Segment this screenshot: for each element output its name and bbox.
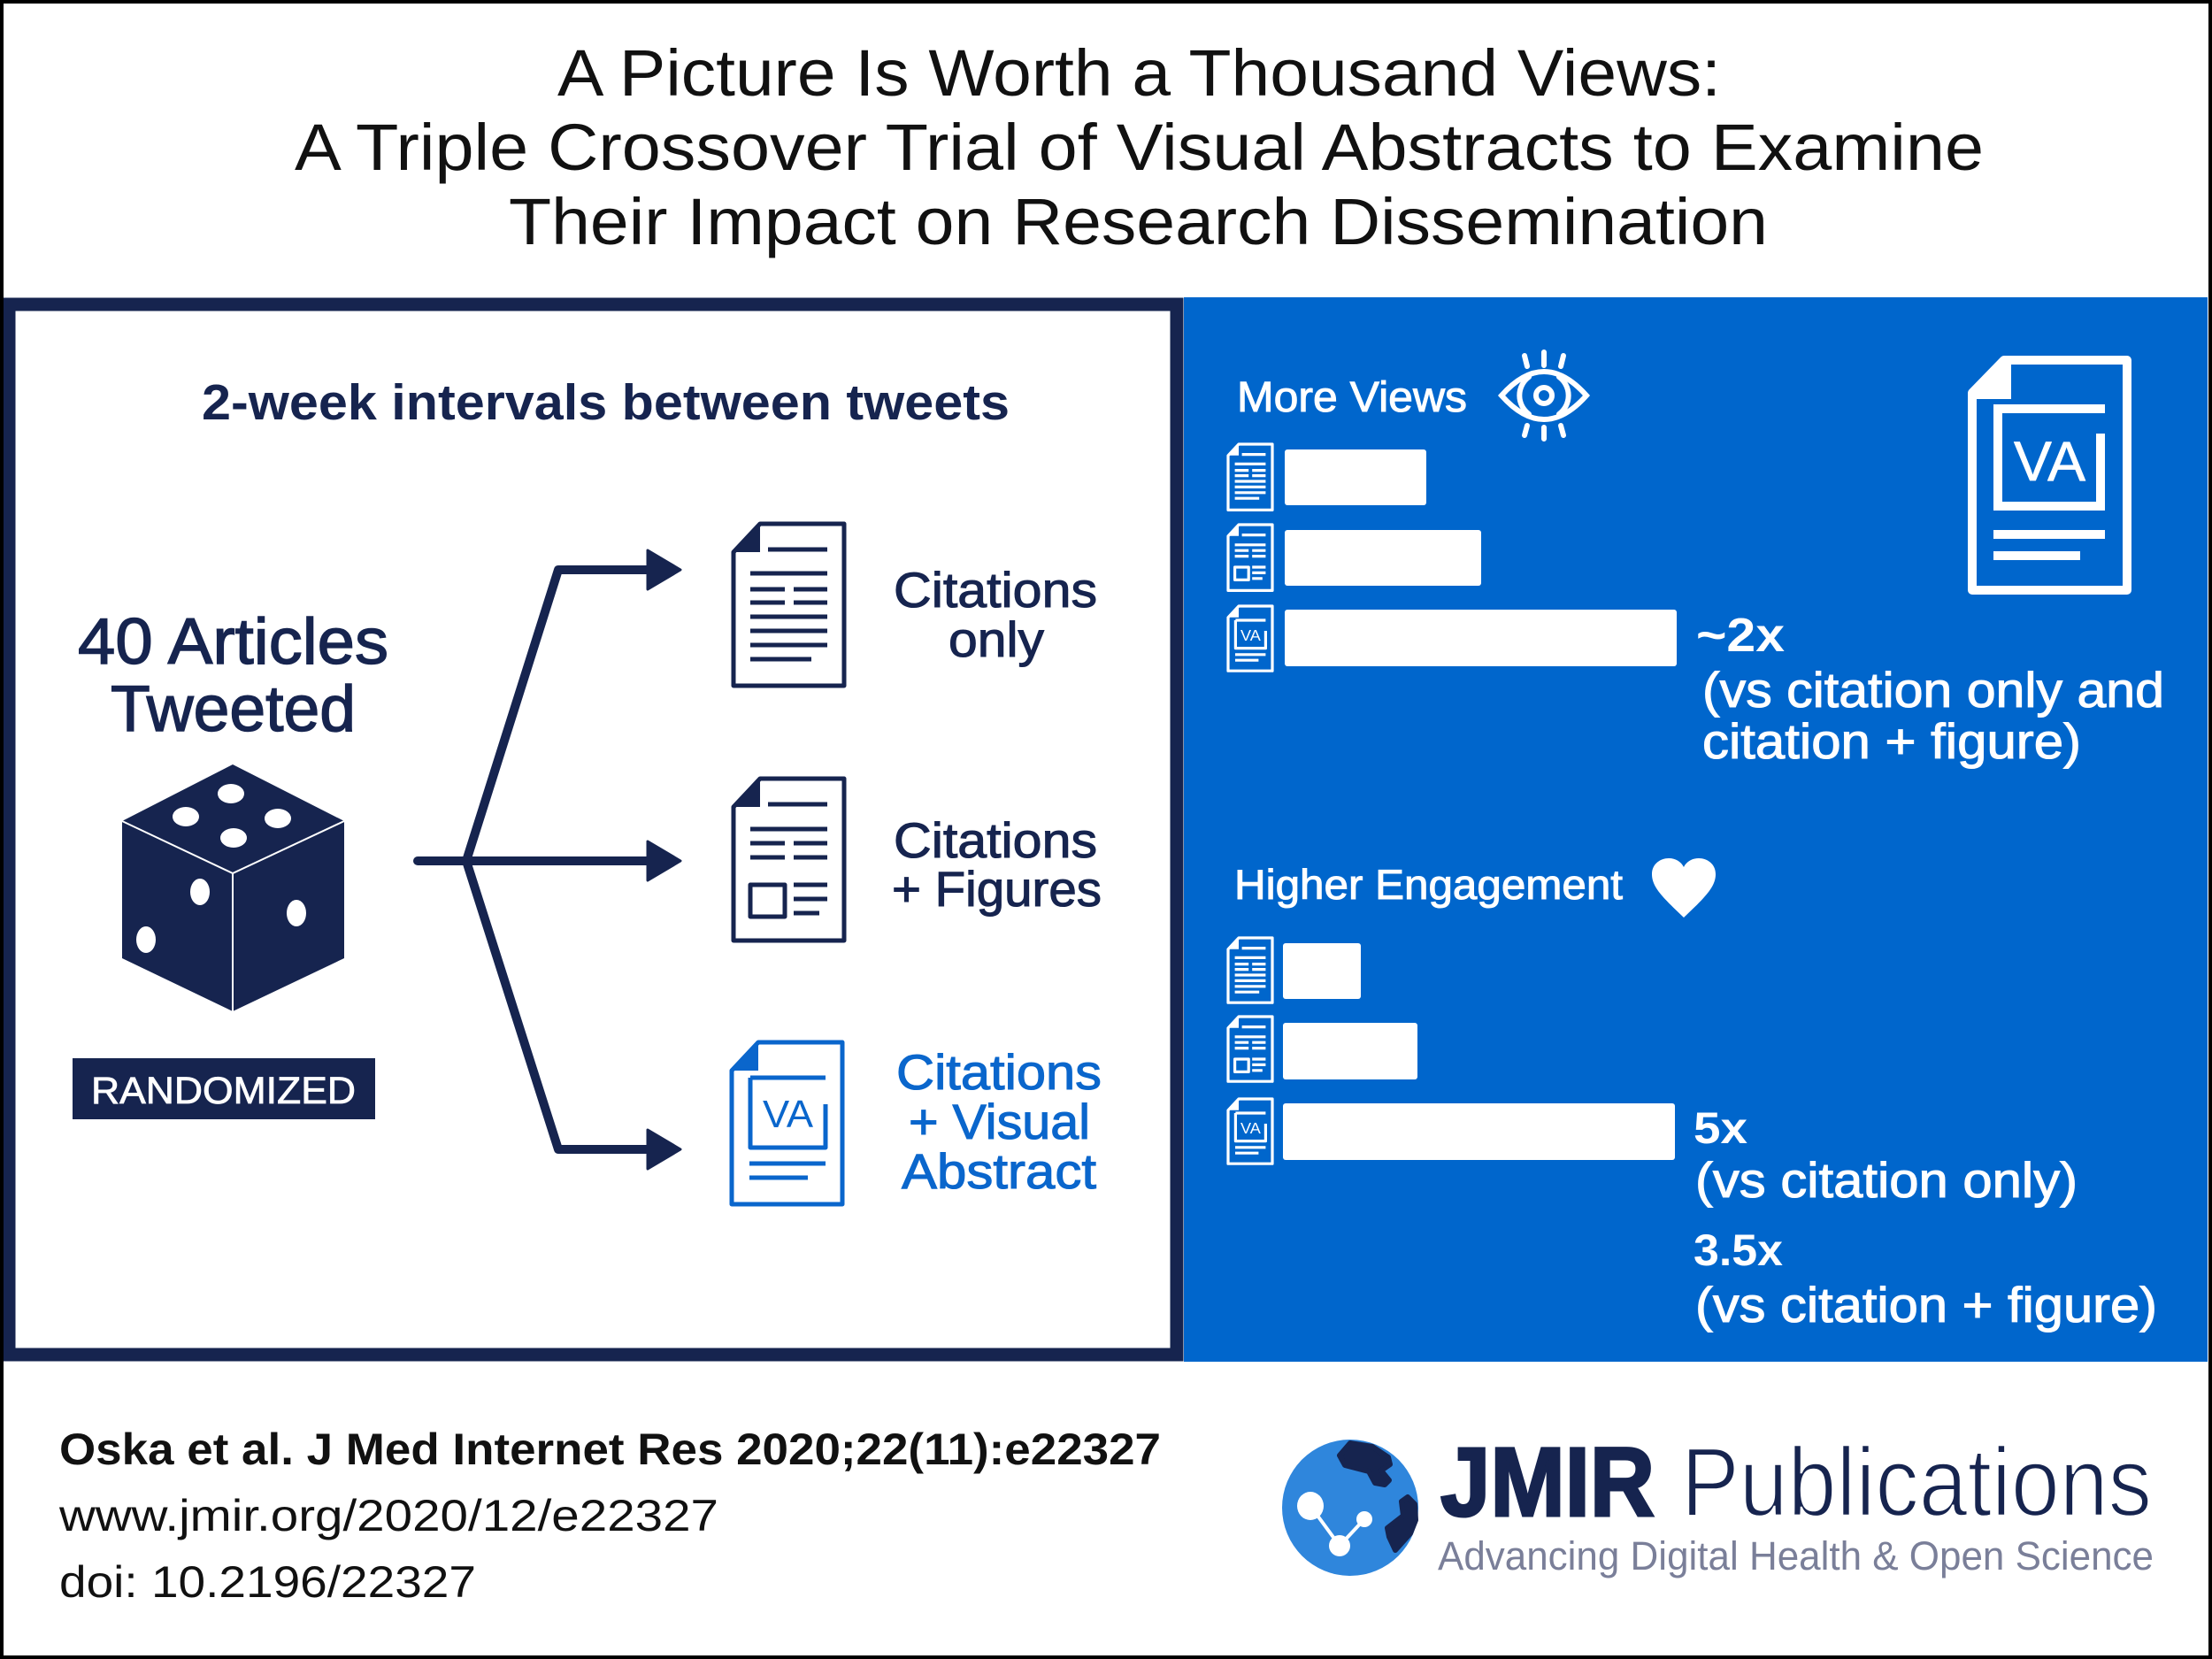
icon: citation with figure document xyxy=(733,779,844,941)
logo globe xyxy=(1282,1440,1418,1576)
heading: more views: More Views xyxy=(1237,374,1467,421)
citation block: Oska et al. J Med Internet Res 2020;22(11):e22327 xyxy=(59,1425,1161,1474)
icon: visual abstract document xyxy=(732,1042,842,1204)
label: citations only xyxy=(894,562,1097,667)
text: 40 articles tweeted: 40 Articles xyxy=(78,606,388,678)
label: citations + visual abstract: + Visual xyxy=(909,1094,1090,1149)
callout: engagement result: 5x xyxy=(1694,1103,1747,1153)
bar: citation only engagement xyxy=(1283,943,1361,999)
icon: large visual abstract document xyxy=(1968,356,2127,590)
label: randomized xyxy=(73,1058,375,1119)
icon: figure row xyxy=(1228,1017,1272,1081)
label: citations + visual abstract xyxy=(896,1044,1102,1199)
icon: visual abstract row xyxy=(1228,606,1272,671)
icon: dice xyxy=(122,764,344,1011)
label: citations + figures: Citations xyxy=(894,812,1097,868)
callout: engagement result: (vs citation only) xyxy=(1695,1152,2078,1208)
icon: eye xyxy=(1502,352,1586,439)
logo wordmark: publications: Publications xyxy=(1681,1428,2152,1537)
arrows: randomization branches xyxy=(418,550,680,1169)
bar: citation + figure engagement xyxy=(1283,1023,1417,1079)
icon: citation document xyxy=(733,524,844,686)
icon: visual abstract row xyxy=(1228,1099,1272,1164)
title: A Triple Crossover Trial of Visual Abstracts to Examine xyxy=(295,111,1984,184)
bar chart: more views xyxy=(1228,444,1677,671)
label: citations only: only xyxy=(949,611,1044,667)
icon: visual abstract row: VA xyxy=(1240,1119,1261,1137)
citation block: www.jmir.org/2020/12/e22327 xyxy=(58,1491,718,1540)
title xyxy=(295,36,1984,258)
text: 40 articles tweeted xyxy=(78,606,388,745)
callout: views result xyxy=(1696,609,2164,769)
citation block xyxy=(58,1425,1161,1607)
callout: engagement result: (vs citation + figure) xyxy=(1695,1277,2157,1333)
label: citations + visual abstract: Citations xyxy=(896,1044,1102,1100)
citation block: doi: 10.2196/22327 xyxy=(59,1557,476,1607)
label: citations + figures xyxy=(892,812,1102,917)
label: citations only: Citations xyxy=(894,562,1097,618)
callout: engagement result: 3.5x xyxy=(1694,1225,1783,1275)
icon: citation row xyxy=(1228,444,1272,510)
icon: figure row xyxy=(1228,525,1272,590)
bar: citation only views xyxy=(1285,449,1426,505)
logo wordmark: JMIR xyxy=(1440,1428,1655,1537)
icon: citation row xyxy=(1228,938,1272,1002)
icon: large visual abstract document: VA xyxy=(2014,431,2085,493)
logo tagline: Advancing Digital Health & Open Science xyxy=(1438,1533,2154,1578)
icon: heart xyxy=(1652,858,1716,918)
logo: JMIR Publications xyxy=(1282,1428,2154,1578)
text: 40 articles tweeted: Tweeted xyxy=(111,673,356,745)
callout: views result: (vs citation only and xyxy=(1702,662,2164,718)
label: randomized: RANDOMIZED xyxy=(91,1070,356,1112)
panel: results xyxy=(1184,297,2208,1362)
panel: study design xyxy=(9,304,1177,1355)
bar: citation + figure views xyxy=(1285,530,1481,586)
icon: visual abstract document: VA xyxy=(763,1093,814,1136)
label: citations + visual abstract: Abstract xyxy=(902,1143,1096,1199)
callout: engagement result xyxy=(1694,1103,2157,1333)
heading: 2-week intervals: 2-week intervals between tweets xyxy=(202,374,1010,431)
icon: visual abstract row: VA xyxy=(1240,626,1261,644)
callout: views result: ~2x xyxy=(1696,609,1785,662)
heading: higher engagement: Higher Engagement xyxy=(1234,861,1623,908)
title: Their Impact on Research Dissemination xyxy=(509,185,1768,258)
callout: views result: citation + figure) xyxy=(1702,713,2081,769)
bar chart: higher engagement xyxy=(1228,938,1675,1164)
label: citations + figures: + Figures xyxy=(892,861,1102,917)
title: A Picture Is Worth a Thousand Views: xyxy=(557,36,1721,110)
bar: visual abstract views xyxy=(1285,610,1677,666)
bar: visual abstract engagement xyxy=(1283,1103,1675,1160)
